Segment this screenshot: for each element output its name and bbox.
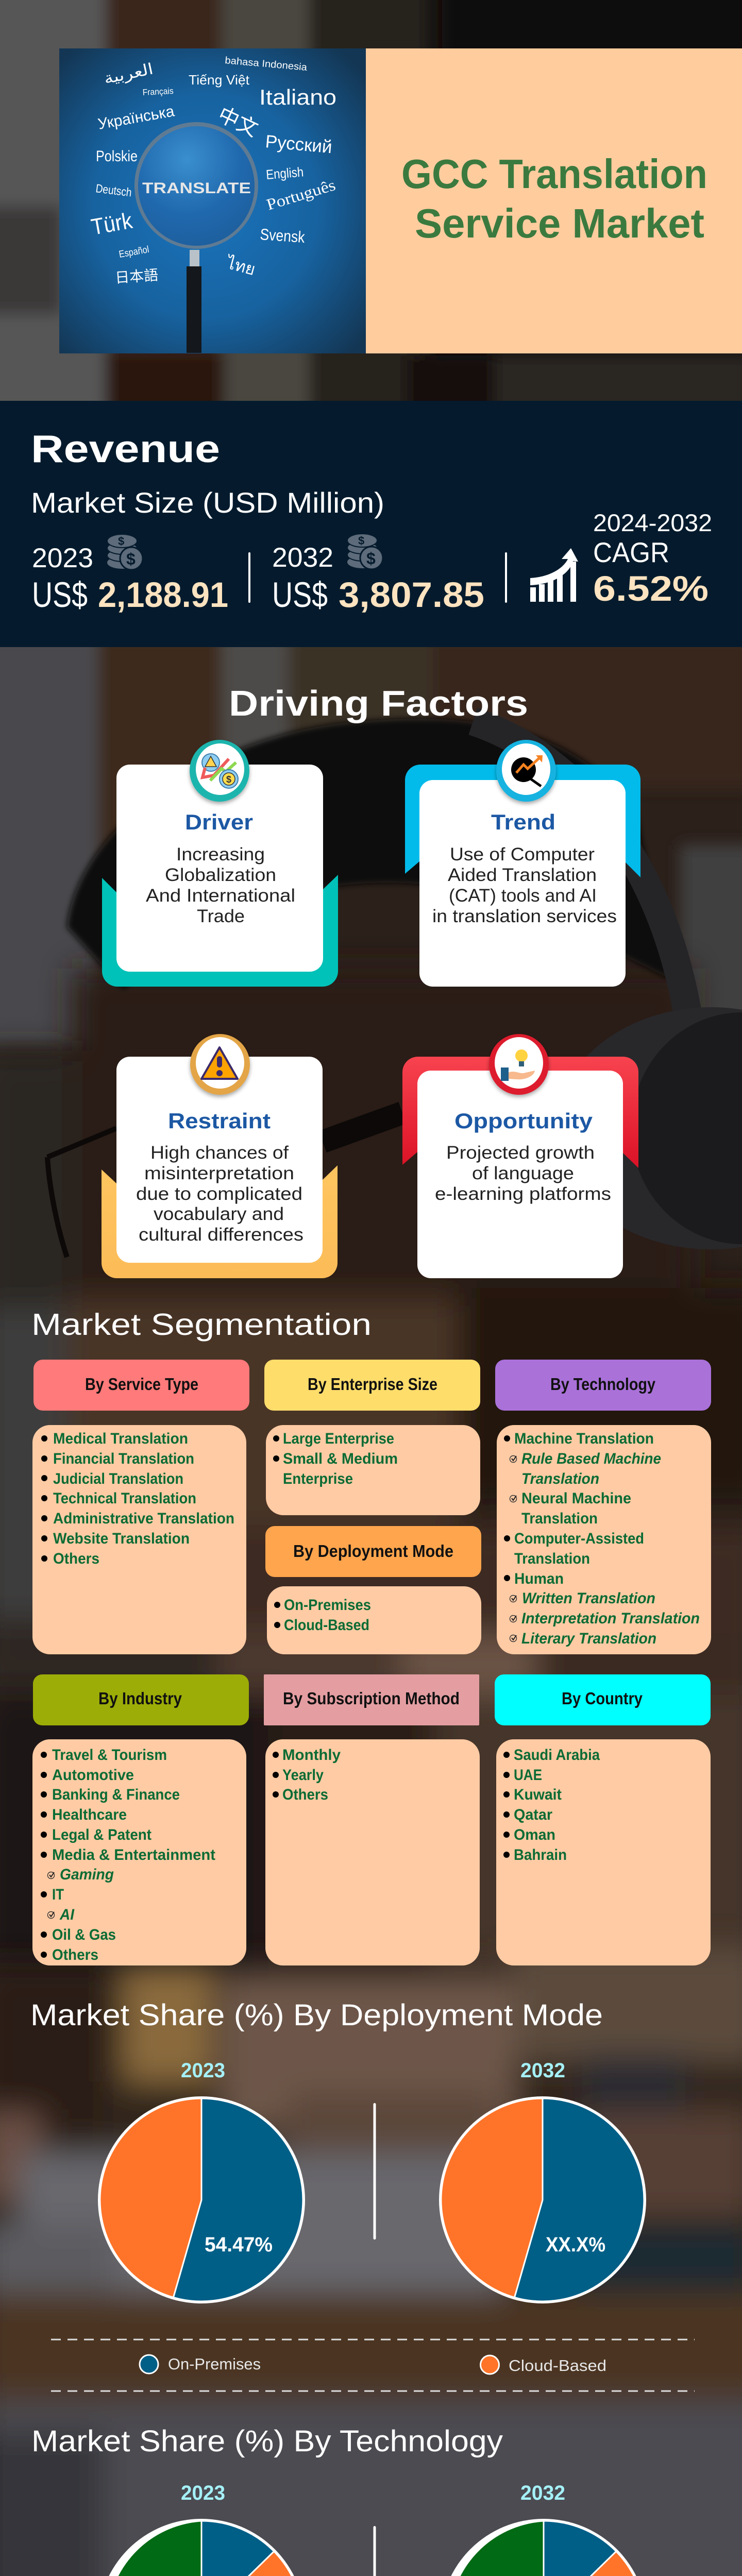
header: by subscription method: [264, 1674, 479, 1725]
list: subscription method: Yearly: [282, 1767, 324, 1784]
list: technology: Translation: [514, 1550, 590, 1567]
list: country: Bahrain: [514, 1846, 567, 1863]
title panel: [366, 48, 742, 353]
text: opportunity description: of language: [472, 1163, 574, 1183]
list: technology: [497, 1425, 711, 1654]
list: industry: Media & Entertainment: [52, 1846, 215, 1863]
language words: Polskie: [96, 148, 138, 165]
legend: deployment mode: On-Premises: [168, 2355, 261, 2373]
subheading: market size: Market Size (USD Million): [31, 486, 384, 519]
stat: 2032 revenue: US$: [272, 575, 328, 615]
list: industry: Travel & Tourism: [52, 1747, 167, 1764]
text: driver description: Trade: [197, 906, 245, 926]
list: industry: Automotive: [52, 1767, 134, 1784]
header: by deployment mode: By Deployment Mode: [293, 1541, 453, 1561]
list: country: [496, 1739, 711, 1965]
list: service type: Technical Translation: [53, 1490, 196, 1507]
text: trend description: in translation services: [432, 906, 617, 926]
icon: driver: [190, 740, 249, 802]
list: technology: Interpretation Translation: [521, 1610, 700, 1627]
list: country: Oman: [514, 1826, 555, 1843]
chart: deployment mode 2023: 54.47%: [205, 2233, 273, 2256]
icon: coins 2023: [107, 534, 143, 570]
language words: 日本語: [114, 267, 159, 286]
language words: [89, 55, 338, 286]
text: driver description: And International: [146, 886, 295, 906]
label: restraint: Restraint: [168, 1109, 271, 1133]
list: industry: [32, 1739, 246, 1965]
list: industry: Legal & Patent: [52, 1826, 151, 1843]
header: by enterprise size: [264, 1360, 480, 1411]
text: driver description: [146, 844, 295, 926]
text: trend description: Use of Computer: [450, 844, 595, 865]
panel: restraint: [102, 1034, 338, 1278]
text: driver description: Increasing: [176, 844, 265, 865]
panel: driver: [102, 740, 338, 987]
list: country: Qatar: [514, 1806, 552, 1823]
language words: ไทย: [223, 252, 258, 279]
language words: Français: [142, 86, 174, 97]
language words: Svensk: [260, 225, 306, 246]
stat: 2032 revenue: 3,807.85: [339, 575, 484, 615]
heading: market share by technology: Market Share (%) By Technology: [31, 2425, 503, 2458]
chart: technology 2032: [440, 2482, 647, 2576]
chart: deployment mode 2032: XX.X%: [546, 2233, 605, 2256]
list: deployment mode: [267, 1586, 481, 1654]
language words: Українська: [96, 103, 176, 133]
language words: 中文: [214, 103, 261, 141]
text: opportunity description: Projected growth: [446, 1143, 595, 1163]
header: by deployment mode: [265, 1526, 481, 1577]
list: country: Saudi Arabia: [514, 1747, 600, 1764]
list: technology: Written Translation: [522, 1590, 655, 1607]
heading: market share by deployment mode: Market Share (%) By Deployment Mode: [30, 1998, 603, 2032]
heading: driving factors: Driving Factors: [229, 683, 528, 723]
list: service type: Medical Translation: [53, 1430, 188, 1447]
stat: CAGR: 2024-2032: [593, 509, 712, 536]
text: opportunity description: e-learning platforms: [435, 1184, 611, 1204]
language words: Português: [264, 176, 338, 214]
list: subscription method: [265, 1739, 480, 1965]
icon: coins 2032: [347, 534, 383, 569]
text: restraint description: cultural differences: [139, 1225, 303, 1245]
list: industry: Others: [52, 1946, 98, 1963]
text: trend description: Aided Translation: [448, 865, 597, 885]
icon: driver: $: [226, 774, 231, 785]
header: by service type: By Service Type: [85, 1375, 198, 1394]
list: enterprise size: Enterprise: [283, 1470, 353, 1487]
header: by country: By Country: [562, 1689, 643, 1708]
icon: opportunity: [489, 1034, 549, 1095]
text: restraint description: vocabulary and: [154, 1204, 284, 1224]
stat: 2023 revenue: 2,188.91: [98, 575, 228, 615]
list: service type: Financial Translation: [53, 1450, 194, 1467]
list: technology: Human: [514, 1570, 564, 1587]
chart: technology 2023: 2023: [181, 2482, 225, 2504]
icon: magnifying glass: [134, 122, 258, 353]
list: technology: Literary Translation: [521, 1630, 656, 1647]
text: driver description: Globalization: [165, 865, 276, 885]
list: deployment mode: On-Premises: [284, 1597, 371, 1614]
language words: Русский: [264, 131, 333, 157]
text: trend description: (CAT) tools and AI: [449, 886, 597, 906]
text: trend description: [432, 844, 617, 926]
legend: deployment mode: [140, 2355, 606, 2375]
text: restraint description: High chances of: [150, 1143, 289, 1163]
icon: trend: [496, 740, 556, 802]
text: restraint description: [136, 1143, 303, 1245]
header: by enterprise size: By Enterprise Size: [308, 1375, 437, 1394]
panel: trend: [405, 740, 640, 987]
list: technology: Translation: [521, 1470, 599, 1487]
language words: Italiano: [259, 85, 336, 109]
list: service type: Website Translation: [53, 1530, 190, 1547]
list: enterprise size: Small & Medium: [283, 1450, 398, 1467]
list: technology: Translation: [521, 1510, 598, 1527]
chart: technology 2032: 2032: [520, 2482, 565, 2504]
panel: opportunity: [402, 1034, 638, 1278]
list: industry: IT: [52, 1886, 64, 1903]
list: industry: Healthcare: [52, 1806, 127, 1823]
heading: market segmentation: Market Segmentation: [31, 1308, 372, 1342]
chart: deployment mode 2032: 2032: [520, 2059, 565, 2082]
language words: Tiếng Việt: [189, 72, 250, 88]
header: by industry: [33, 1674, 249, 1725]
icon: magnifying glass: TRANSLATE: [142, 180, 251, 197]
language words: English: [265, 164, 304, 182]
list: country: Kuwait: [514, 1786, 562, 1803]
header: by country: [495, 1674, 711, 1725]
text: opportunity description: [435, 1143, 611, 1204]
list: service type: Judicial Translation: [53, 1470, 183, 1487]
stat: 2023 revenue: US$: [32, 575, 88, 615]
background: blurred header photo: [0, 0, 742, 422]
panel: revenue: [0, 401, 742, 647]
heading: revenue: Revenue: [31, 427, 220, 470]
hero image: translate magnifier: [59, 48, 366, 353]
header: by industry: By Industry: [98, 1689, 182, 1708]
stat: CAGR: CAGR: [593, 536, 669, 568]
chart: deployment mode 2032: [439, 2059, 646, 2303]
icon: restraint: [190, 1034, 250, 1095]
label: opportunity: Opportunity: [454, 1109, 593, 1133]
stat: CAGR: [593, 509, 712, 608]
list: deployment mode: Cloud-Based: [284, 1617, 369, 1634]
list: subscription method: Others: [282, 1786, 328, 1803]
background: photo of man with headset and desk: [0, 634, 742, 2576]
language words: العربية: [102, 60, 155, 88]
stat: 2023 revenue: [32, 543, 228, 615]
text: restraint description: misinterpretation: [144, 1163, 294, 1183]
header: by service type: [33, 1360, 249, 1411]
header: by subscription method: By Subscription Method: [283, 1689, 460, 1708]
list: industry: Banking & Finance: [52, 1786, 180, 1803]
list: service type: Others: [53, 1550, 99, 1567]
text: restraint description: due to complicated: [136, 1184, 302, 1204]
label: driver: Driver: [185, 810, 253, 834]
list: industry: Gaming: [60, 1866, 114, 1883]
list: technology: Machine Translation: [514, 1430, 654, 1447]
list: service type: [32, 1425, 246, 1654]
language words: Español: [118, 244, 150, 260]
chart: deployment mode 2023: 2023: [181, 2059, 225, 2082]
chart: technology 2023: [98, 2482, 305, 2576]
stat: 2023 revenue: 2023: [32, 543, 93, 573]
list: enterprise size: [266, 1425, 480, 1515]
list: industry: Oil & Gas: [52, 1926, 116, 1943]
stat: 2032 revenue: [272, 543, 484, 615]
list: technology: Rule Based Machine: [521, 1450, 661, 1467]
stat: CAGR: 6.52%: [593, 569, 709, 608]
list: technology: Computer-Assisted: [514, 1530, 644, 1547]
label: trend: Trend: [491, 810, 555, 834]
list: country: UAE: [514, 1767, 542, 1784]
title panel: GCC Translation: [401, 151, 707, 197]
list: technology: Neural Machine: [521, 1490, 631, 1507]
list: service type: Administrative Translation: [53, 1510, 234, 1527]
icon: growth chart: [530, 548, 578, 602]
language words: bahasa Indonesia: [225, 55, 308, 73]
chart: deployment mode 2023: [98, 2059, 305, 2303]
title panel: Service Market: [415, 200, 704, 246]
list: industry: AI: [59, 1906, 75, 1923]
header: by technology: [495, 1360, 711, 1411]
list: subscription method: Monthly: [282, 1747, 341, 1764]
language words: Deutsch: [95, 181, 132, 199]
legend: deployment mode: Cloud-Based: [509, 2357, 606, 2375]
stat: 2032 revenue: 2032: [272, 543, 333, 573]
list: enterprise size: Large Enterprise: [283, 1430, 394, 1447]
language words: Türk: [89, 208, 134, 240]
header: by technology: By Technology: [550, 1375, 656, 1394]
